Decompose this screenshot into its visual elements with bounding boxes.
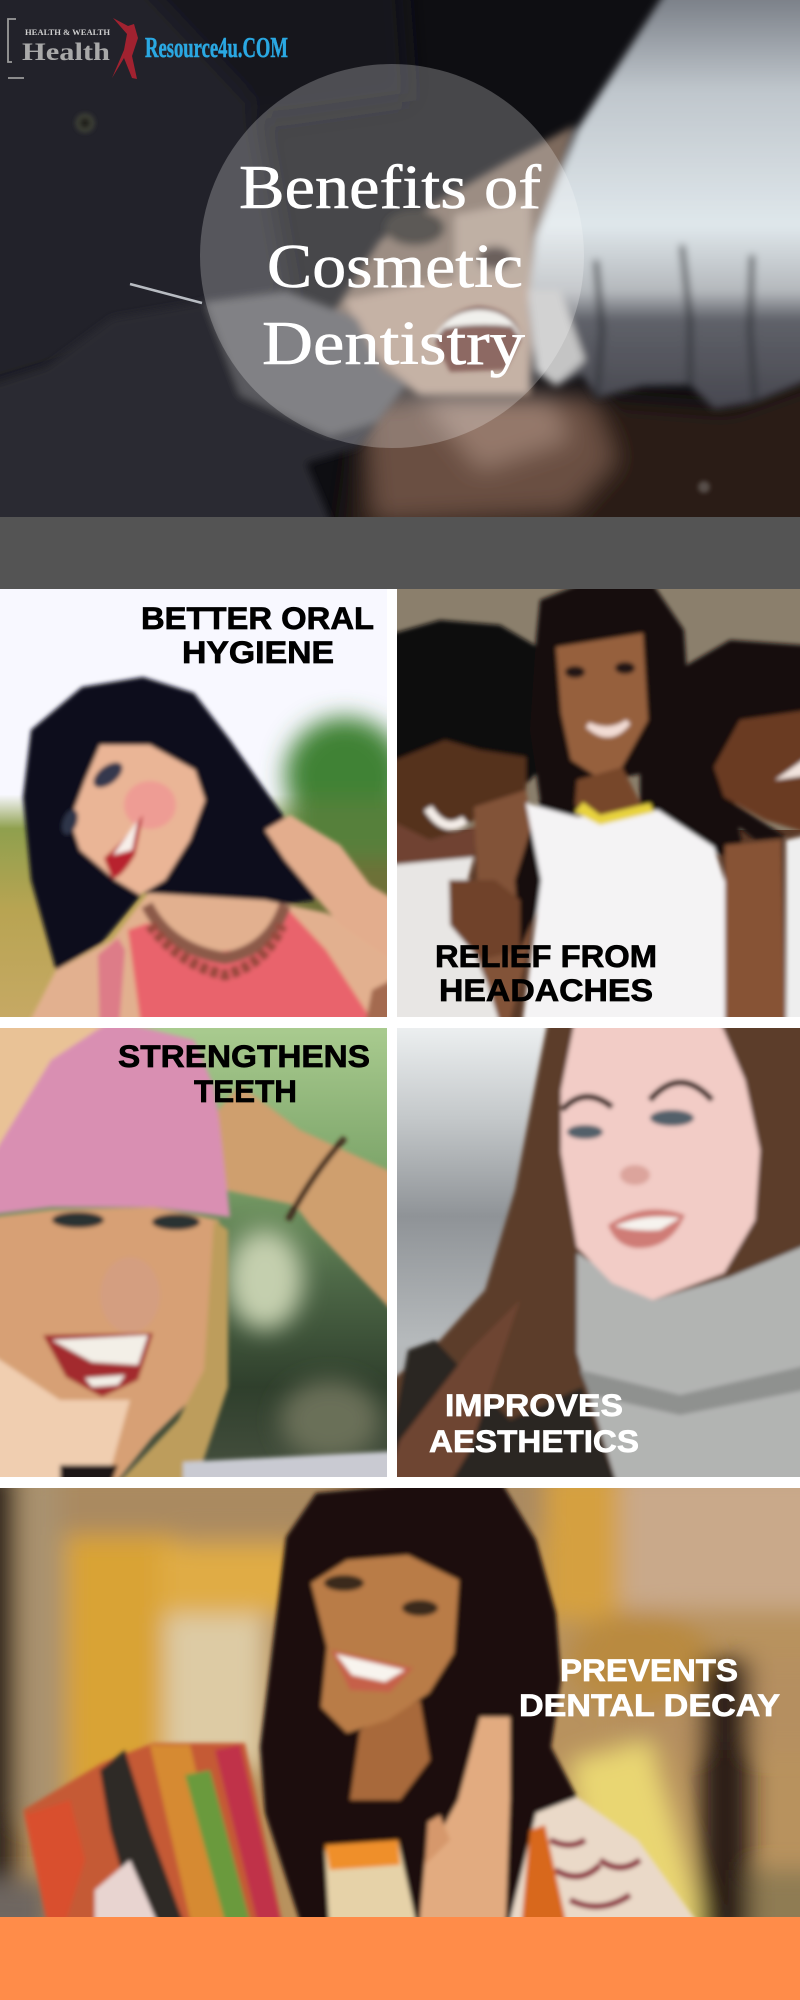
- logo: Health: [22, 39, 110, 66]
- label: PREVENTS: [560, 1652, 738, 1688]
- label: [118, 1044, 370, 1102]
- panel: improves aesthetics: [397, 1028, 800, 1477]
- translucent circle: [200, 64, 584, 448]
- photo: woman in grey scarf: [397, 1028, 800, 1477]
- label: [142, 606, 374, 664]
- title: Dentistry: [262, 310, 525, 378]
- label: BETTER ORAL: [141, 600, 374, 636]
- title: Benefits of: [239, 154, 541, 222]
- label: RELIEF FROM: [435, 938, 657, 974]
- label: STRENGTHENS: [118, 1038, 370, 1074]
- label: HYGIENE: [182, 634, 334, 670]
- logo: HEALTH & WEALTH: [25, 28, 111, 37]
- label: [429, 1394, 638, 1453]
- logo: Resource4u.COM: [145, 33, 288, 64]
- panel: relief from headaches: [397, 589, 800, 1017]
- panel: prevents dental decay: [0, 1470, 800, 1940]
- label: IMPROVES: [445, 1387, 623, 1423]
- label: HEADACHES: [439, 972, 653, 1008]
- label: [436, 944, 656, 1002]
- label: AESTHETICS: [429, 1423, 639, 1459]
- photo: woman in pink top: [0, 672, 387, 1017]
- logo: [8, 18, 288, 79]
- photo: smiling woman with folded hands: [0, 1470, 800, 1940]
- title: [239, 154, 541, 378]
- panel: better oral hygiene: [0, 606, 387, 1017]
- photo: three women: [397, 589, 800, 1017]
- label: [520, 1658, 780, 1717]
- title: Cosmetic: [267, 233, 523, 301]
- photo: woman in pink hat: [0, 1028, 387, 1477]
- label: DENTAL DECAY: [519, 1687, 780, 1723]
- grey band: [0, 517, 800, 589]
- panel: hero photo with title: [0, 0, 800, 560]
- label: TEETH: [194, 1073, 297, 1109]
- panel: strengthens teeth: [0, 1028, 387, 1477]
- photo: dentist at work: [0, 0, 800, 560]
- orange footer band: [0, 1917, 800, 2000]
